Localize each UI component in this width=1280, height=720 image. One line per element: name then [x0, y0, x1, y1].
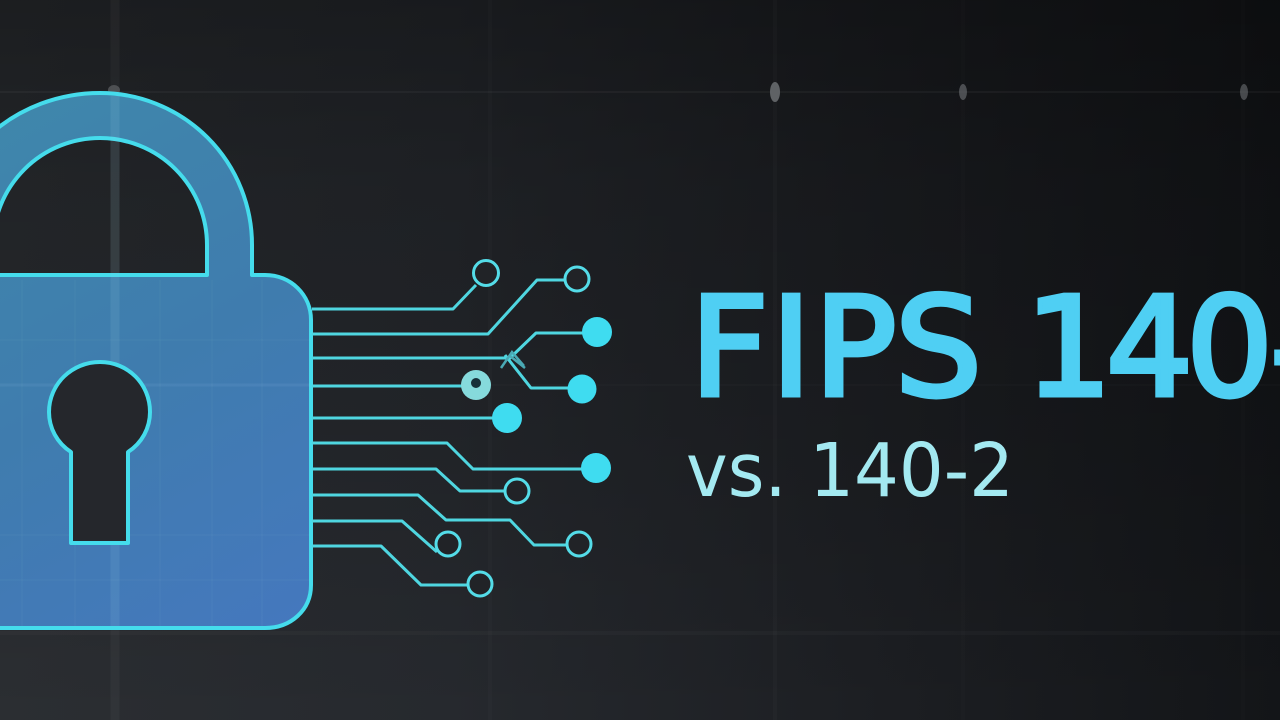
trace 5	[312, 416, 494, 420]
padlock inner grid	[0, 96, 310, 626]
trace 1	[312, 285, 476, 309]
trace 8	[312, 495, 568, 545]
trace 2	[312, 280, 566, 334]
trace 7	[312, 469, 506, 491]
grid node dots	[108, 82, 1248, 102]
trace 4	[312, 384, 464, 388]
circuit crossing artifact	[501, 352, 525, 368]
trace 10	[312, 546, 469, 585]
padlock shackle and body	[0, 93, 311, 628]
filled circuit nodes	[492, 317, 612, 483]
circuit node with dark centre	[461, 370, 491, 400]
subtitle: vs. 140-2	[686, 428, 1014, 514]
trace 3b crossing	[505, 355, 570, 388]
keyhole	[49, 362, 150, 543]
circuit traces	[312, 280, 584, 585]
icon: padlock	[0, 93, 311, 628]
trace 9	[312, 521, 437, 552]
open circuit nodes	[436, 260, 591, 596]
trace 6	[312, 443, 582, 469]
trace 3	[312, 333, 584, 358]
